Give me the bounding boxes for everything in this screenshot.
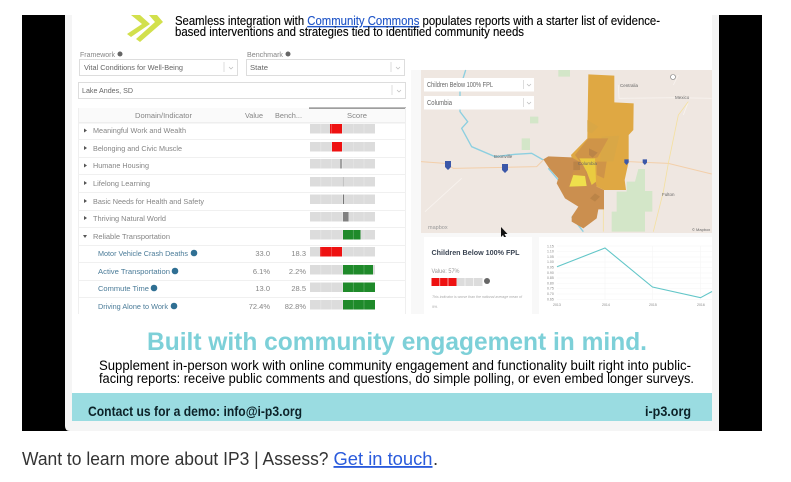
intro text [175,13,660,39]
row: Humane Housing [84,159,375,170]
table header: Bench... [275,111,302,120]
chart axis labels: 0.65 [547,298,554,302]
chart axis labels: 0.95 [547,266,554,270]
indicator card: Children Below 100% FPL [432,248,520,257]
chart axis labels [547,244,705,307]
intro text: Seamless integration with Community Commons populates reports with a starter list of evidence- [175,13,660,28]
map dropdown: indicator [424,78,534,92]
score table [78,108,406,314]
map place labels: Fulton [662,192,675,197]
map tracts [543,156,604,228]
chart axis labels: 1.05 [547,255,554,259]
map cursor [501,227,508,239]
row: Motor Vehicle Crash Deaths [98,247,375,258]
contact bar: Contact us for a demo: info@i-p3.org [88,403,302,419]
row: Motor Vehicle Crash Deaths: 18.3 [291,249,306,258]
row: Commute Time: Commute Time [98,284,149,293]
row: Commute Time: 13.0 [255,284,270,293]
section heading: Built with community engagement in mind. [147,328,647,356]
chart axis labels: 2013 [553,303,561,307]
row: Motor Vehicle Crash Deaths: 33.0 [255,249,270,258]
map dropdown: geography [424,96,534,110]
benchmark selector [246,50,404,76]
chart axis labels: 0.75 [547,286,554,290]
row: Driving Alone to Work: 82.8% [285,302,306,311]
map place labels: Columbia [578,161,598,166]
right column background [411,70,712,314]
map place labels: Centralia [620,83,639,88]
map place labels: Boonville [494,154,513,159]
chart axis labels: 0.70 [547,292,554,296]
location selector [78,82,406,98]
row: Thriving Natural World [84,212,375,223]
chart axis labels: 0.80 [547,282,554,286]
indicator card: Value: 57% [432,268,460,275]
map green areas [522,70,652,232]
slide panel [65,15,719,431]
row: Lifelong Learning: Lifelong Learning [93,179,150,188]
row: Meaningful Work and Wealth [84,124,375,135]
location selector: Lake Andes, SD [82,86,134,95]
table header: Domain/Indicator [135,111,192,120]
framework selector: Framework [80,50,115,59]
closing call to action: Want to learn more about IP3 | Assess? [22,448,328,469]
row: Active Transportation: Active Transportation [98,267,170,276]
map left highway shields [445,161,508,173]
section body text [99,358,694,386]
chart axis labels: 0.85 [547,276,554,280]
intro text: based interventions and strategies tied to identified community needs [175,24,524,39]
indicator card: 9%. [432,305,438,309]
chart axis labels: 0.90 [547,271,554,275]
indicator card [424,237,532,314]
row: Commute Time: 28.5 [291,284,306,293]
row: Meaningful Work and Wealth: Meaningful Work and Wealth [93,126,186,135]
row: Motor Vehicle Crash Deaths: Motor Vehicle Crash Deaths [98,249,188,258]
map highway shields [624,159,647,165]
row: Reliable Transportation [83,230,375,241]
map dropdown: geography: Columbia [427,100,452,107]
map [421,70,712,233]
chart axis labels: 2015 [649,303,657,307]
row: Belonging and Civic Muscle [84,142,375,153]
chart axis labels: 1.15 [547,244,554,248]
contact bar: i-p3.org [645,403,691,419]
closing call to action: . [433,448,438,469]
row: Active Transportation: 2.2% [289,267,306,276]
row: Reliable Transportation: Reliable Transportation [93,232,170,241]
row: Driving Alone to Work: 72.4% [249,302,270,311]
row: Active Transportation: 6.1% [253,267,270,276]
framework selector: Vital Conditions for Well-Being [84,63,183,72]
framework selector [80,50,238,76]
map dropdown: indicator: Children Below 100% FPL [427,82,493,89]
section body text: facing reports: receive public comments and questions, do simple polling, or even embed longer surveys. [99,371,694,386]
closing call to action: Get in touch [334,448,432,469]
row: Lifelong Learning [84,177,375,188]
table header: Score [347,111,367,120]
map place labels [428,83,710,232]
chart axis labels: 2016 [697,303,705,307]
map place labels: Mexico [675,95,690,100]
map place labels: © Mapbox [692,227,710,232]
table header [78,108,406,314]
row: Belonging and Civic Muscle: Belonging and Civic Muscle [93,144,182,153]
row: Basic Needs for Health and Safety: Basic Needs for Health and Safety [93,197,204,206]
map marker [670,74,676,80]
row: Driving Alone to Work [98,300,375,311]
chart axis labels: 1.10 [547,250,554,254]
benchmark selector: Benchmark [247,50,283,59]
row: Humane Housing: Humane Housing [93,161,149,170]
map place labels: mapbox [428,225,448,231]
section body text: Supplement in-person work with online community engagement and functionality built right into public- [99,358,691,373]
table header: Value [245,111,263,120]
icon: double chevron [127,15,163,42]
benchmark selector: State [250,63,268,72]
row: Driving Alone to Work: Driving Alone to Work [98,302,168,311]
row: Commute Time [98,282,375,293]
row: Thriving Natural World: Thriving Natural World [93,214,166,223]
chart axis labels: 2014 [602,303,610,307]
indicator card: This indicator is worse than the national average mean of [432,295,523,299]
chart axis labels: 1.00 [547,260,554,264]
contact bar [72,393,712,421]
row: Basic Needs for Health and Safety [84,194,375,206]
row: Active Transportation [98,265,375,276]
map river and roads [421,70,712,232]
line chart [539,237,712,314]
